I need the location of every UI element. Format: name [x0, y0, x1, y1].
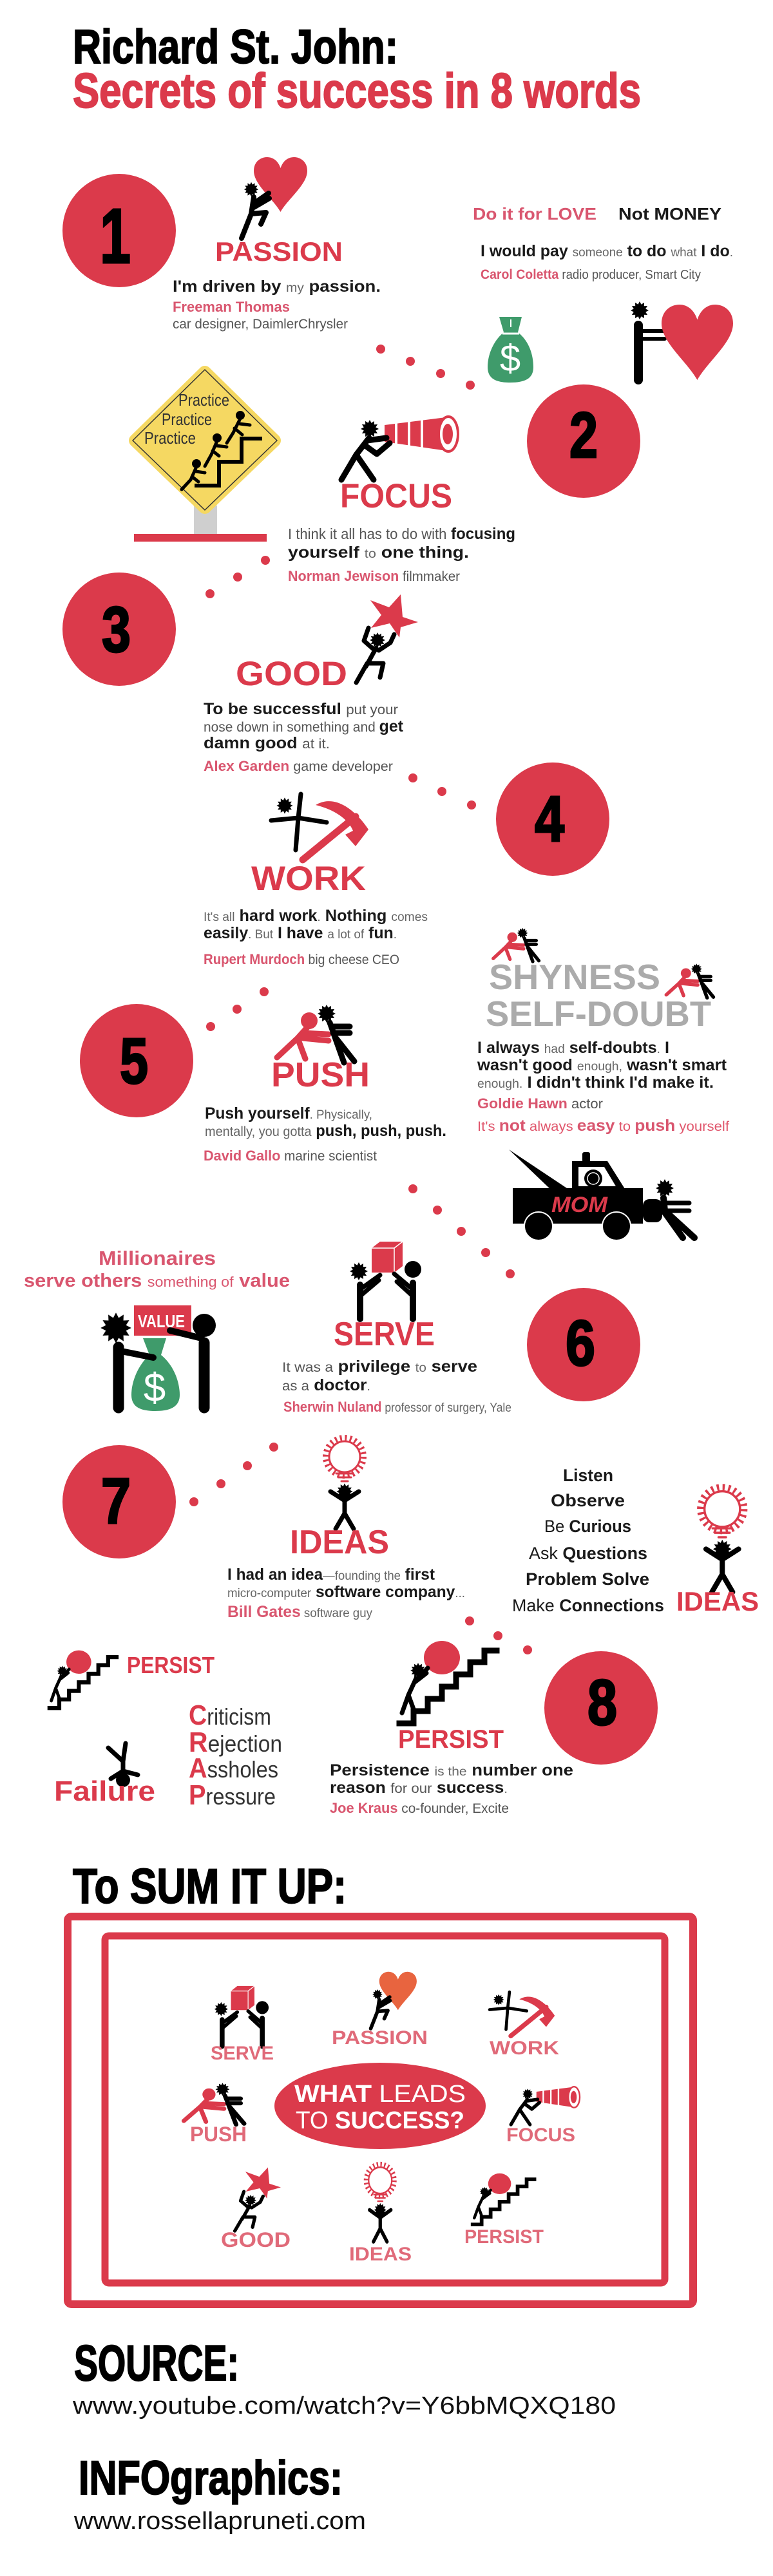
- number badge 4: 4: [535, 783, 564, 855]
- quote: Joe Kraus: Persistence is the number one: [330, 1761, 573, 1779]
- quote: Carol Coletta: Carol Coletta radio producer, Smart City: [481, 267, 701, 282]
- summary item: persist: [464, 2174, 544, 2248]
- number badge 2: 2: [569, 399, 598, 471]
- list: listen observe be curious: Listen: [563, 1466, 613, 1485]
- quote: Sherwin Nuland: as a doctor .: [282, 1376, 370, 1394]
- number badge 1: 1: [100, 192, 131, 279]
- number badge 5: [80, 1004, 193, 1117]
- quote: Alex Garden: damn good at it.: [204, 734, 330, 752]
- quote: Alex Garden: [204, 700, 404, 774]
- quote: Carol Coletta: Do it for LOVE: [473, 204, 596, 223]
- quote: David Gallo: [204, 1104, 446, 1164]
- list: CRAP acronym: Rejection: [189, 1727, 282, 1758]
- icon: passion figure climbing heart: [242, 157, 307, 238]
- source url: www.youtube.com/watch?v=Y6bbMQXQ180: [72, 2392, 616, 2420]
- number badge 8: 8: [587, 1667, 617, 1739]
- panel: summary inner frame: [105, 1936, 665, 2283]
- icon: two figures exchanging value and money: $: [144, 1366, 166, 1410]
- quote: Freeman Thomas: [173, 278, 381, 332]
- quote: David Gallo: Push yourself. Physically,: [205, 1104, 372, 1122]
- quote: Goldie Hawn: enough. I didn't think I'd make it.: [477, 1074, 714, 1092]
- heading: failure: Failure: [54, 1776, 155, 1807]
- quote: David Gallo: David Gallo marine scientist: [204, 1148, 377, 1164]
- number badge 8: [544, 1651, 658, 1765]
- icon: small persist stairs: [50, 1651, 117, 1708]
- dots: 2 to 3: [205, 556, 270, 598]
- quote: Alex Garden: nose down in something and get: [204, 717, 404, 735]
- heading: to sum it up: To SUM IT UP:: [73, 1859, 347, 1914]
- callout: what leads to success: WHAT LEADS: [294, 2081, 466, 2108]
- quote: millionaires serve others: serve others something of value: [24, 1271, 290, 1291]
- quote: Goldie Hawn: Goldie Hawn actor: [477, 1095, 603, 1112]
- number badge 6: [527, 1288, 640, 1401]
- title: Secrets of success in 8 words: [73, 64, 641, 118]
- number badge 5: 5: [120, 1025, 148, 1097]
- quote: David Gallo: mentally, you gotta push, push, push.: [205, 1122, 446, 1140]
- list: listen observe be curious: Ask Questions: [529, 1544, 647, 1563]
- dots: 4 to 5: [206, 987, 269, 1031]
- icon: practice road sign: Practice: [162, 410, 212, 429]
- icon: two figures exchanging value and money: VALUE: [138, 1311, 185, 1331]
- icon: focus telescope figure: [341, 417, 458, 480]
- summary item: focus: [506, 2087, 580, 2146]
- quote: Rupert Murdoch: It's all hard work. Nothing comes: [204, 907, 428, 925]
- list: CRAP acronym: [189, 1700, 282, 1811]
- dots: 7 to 8: [465, 1616, 532, 1654]
- summary item: passion: PASSION: [332, 2027, 428, 2049]
- quote: Goldie Hawn: It's not always easy to push yourself: [477, 1117, 729, 1135]
- heading: self-doubt: SELF-DOUBT: [486, 994, 711, 1034]
- list: listen observe be curious: Problem Solve: [526, 1569, 649, 1589]
- dots: 5 to 6: [408, 1184, 515, 1278]
- icon: mom truck with pushing figure: [509, 1150, 694, 1240]
- quote: Norman Jewison: yourself to one thing.: [288, 544, 469, 562]
- list: listen observe be curious: Make Connections: [512, 1596, 664, 1615]
- title: Richard St. John:: [73, 20, 398, 73]
- quote: Alex Garden: To be successful put your: [204, 700, 398, 718]
- list: listen observe be curious: [512, 1466, 664, 1615]
- panel: summary outer frame: [68, 1917, 693, 2304]
- heading: ideas: IDEAS: [290, 1524, 389, 1561]
- callout: what leads to success: [274, 2063, 486, 2149]
- quote: Norman Jewison: [288, 525, 515, 584]
- icon: pushing figures above shyness: [493, 928, 539, 961]
- quote: Freeman Thomas: I'm driven by my passion.: [173, 278, 381, 296]
- icon: practice road sign: Practice: [178, 390, 229, 410]
- dots: 6 to 7: [189, 1443, 278, 1506]
- quote: Joe Kraus: reason for our success .: [330, 1779, 508, 1797]
- quote: Goldie Hawn: wasn't good enough, wasn't smart: [477, 1056, 727, 1074]
- sign base bar: [134, 534, 267, 542]
- quote: Bill Gates: Bill Gates software guy: [227, 1603, 372, 1621]
- summary item: persist: PERSIST: [464, 2226, 544, 2248]
- quote: Joe Kraus: Joe Kraus co-founder, Excite: [330, 1800, 509, 1816]
- heading: persist small: PERSIST: [127, 1652, 215, 1678]
- quote: Alex Garden: Alex Garden game developer: [204, 758, 393, 774]
- dots: 3 to 4: [408, 773, 476, 810]
- icon: mom truck with pushing figure: MOM: [551, 1193, 608, 1217]
- heading: good: GOOD: [236, 655, 347, 693]
- quote: millionaires serve others: Millionaires: [99, 1247, 216, 1269]
- summary item: focus: FOCUS: [506, 2125, 575, 2146]
- heading: push: PUSH: [271, 1056, 370, 1094]
- quote: Bill Gates: [227, 1566, 465, 1621]
- author url: www.rossellapruneti.com: [73, 2508, 366, 2535]
- callout: what leads to success: TO SUCCESS?: [296, 2107, 464, 2134]
- quote: Freeman Thomas: car designer, DaimlerChrysler: [173, 317, 348, 332]
- heading: ideas right: IDEAS: [676, 1586, 759, 1616]
- summary item: work: [490, 1992, 559, 2059]
- summary item: good: [221, 2168, 291, 2251]
- number badge 7: [62, 1445, 176, 1558]
- quote: Carol Coletta: Not MONEY: [618, 204, 721, 223]
- quote: Freeman Thomas: Freeman Thomas: [173, 299, 290, 315]
- list: listen observe be curious: Be Curious: [544, 1517, 631, 1536]
- list: CRAP acronym: Criticism: [189, 1700, 271, 1731]
- quote: Rupert Murdoch: [204, 907, 428, 967]
- icon: upside-down failure figure: [108, 1743, 138, 1787]
- icon: money bag: [488, 317, 533, 383]
- number badge 3: 3: [102, 594, 131, 666]
- icon: push figures: [277, 1005, 354, 1063]
- list: CRAP acronym: Pressure: [189, 1779, 276, 1811]
- heading: focus: FOCUS: [340, 477, 452, 515]
- quote: Carol Coletta: [473, 204, 733, 282]
- quote: Carol Coletta: I would pay someone to do what I do.: [481, 242, 733, 260]
- heading: shyness: SHYNESS: [489, 957, 660, 997]
- icon: ideas figure right: [701, 1488, 744, 1592]
- summary item: push: [184, 2083, 247, 2146]
- icon: practice road sign: [133, 370, 277, 535]
- heading: work: WORK: [251, 860, 366, 898]
- quote: Goldie Hawn: I always had self-doubts. I: [477, 1039, 669, 1057]
- quote: millionaires serve others: [24, 1247, 290, 1291]
- number badge 6: 6: [566, 1307, 595, 1379]
- number badge 1: [62, 174, 176, 287]
- heading: serve: SERVE: [334, 1316, 435, 1353]
- number badge 2: [527, 384, 640, 498]
- quote: Sherwin Nuland: Sherwin Nuland professor of surgery, Yale: [283, 1399, 511, 1415]
- summary item: work: WORK: [490, 2038, 559, 2059]
- summary item: ideas: IDEAS: [349, 2244, 412, 2265]
- title: [73, 20, 641, 118]
- icon: pushing figures above self-doubt: [666, 963, 714, 998]
- quote: Sherwin Nuland: [282, 1358, 511, 1415]
- quote: Joe Kraus: [330, 1761, 573, 1816]
- summary item: serve: SERVE: [211, 2043, 274, 2064]
- heading: persist: PERSIST: [398, 1725, 504, 1754]
- summary item: ideas: [349, 2164, 412, 2265]
- icon: two figures exchanging value and money: [100, 1305, 216, 1411]
- icon: large persist stairs: [399, 1641, 497, 1723]
- icon: work figure with hammer: [271, 794, 368, 860]
- icon: money bag: $: [500, 337, 520, 379]
- icon: ideas figure with light bulb: [326, 1438, 363, 1529]
- summary item: good: GOOD: [221, 2228, 291, 2251]
- list: CRAP acronym: Assholes: [189, 1752, 278, 1784]
- icon: practice road sign: Practice: [144, 428, 196, 448]
- quote: Norman Jewison: Norman Jewison filmmaker: [288, 568, 460, 584]
- icon: good figure with star: [356, 594, 418, 683]
- summary item: push: PUSH: [190, 2123, 247, 2146]
- number badge 3: [62, 573, 176, 686]
- summary item: serve: [211, 1986, 274, 2064]
- quote: Norman Jewison: I think it all has to do with focusing: [288, 525, 515, 543]
- number badge 4: [496, 762, 609, 876]
- heading: infographics: INFOgraphics:: [79, 2451, 343, 2505]
- quote: Goldie Hawn: [477, 1039, 729, 1135]
- summary item: passion: [332, 1972, 428, 2049]
- quote: Bill Gates: I had an idea—founding the first: [227, 1566, 435, 1584]
- number badge 7: 7: [101, 1465, 131, 1537]
- quote: Bill Gates: micro-computer software company...: [227, 1583, 465, 1601]
- heading: passion: PASSION: [215, 236, 343, 267]
- icon: serve figures lifting box: [350, 1242, 421, 1319]
- list: listen observe be curious: Observe: [551, 1491, 625, 1510]
- heading: source: SOURCE:: [74, 2334, 239, 2391]
- quote: Rupert Murdoch: easily. But I have a lot of fun.: [204, 924, 397, 942]
- dots: 1 to 2: [376, 345, 475, 390]
- quote: Sherwin Nuland: It was a privilege to serve: [282, 1358, 477, 1376]
- icon: figure holding heart: [631, 301, 733, 380]
- quote: Rupert Murdoch: Rupert Murdoch big cheese CEO: [204, 951, 399, 967]
